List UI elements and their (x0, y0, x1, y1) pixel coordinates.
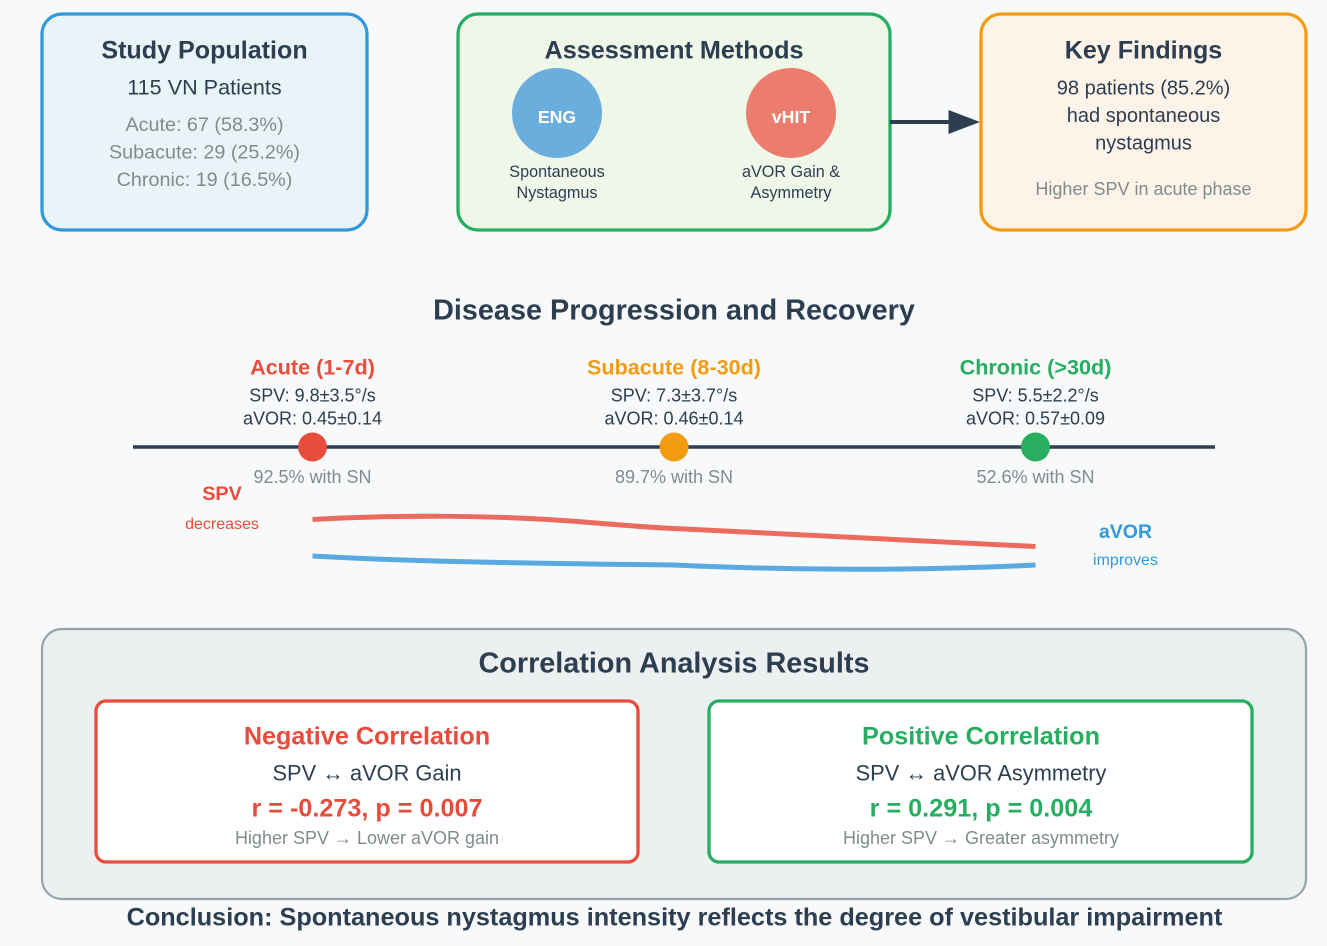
text: main finding: 98 patients (85.2%) (1057, 78, 1230, 100)
text: vHIT label: Asymmetry (751, 184, 832, 202)
label: aVOR improves: aVOR (1099, 521, 1152, 543)
timeline point: acute: 92.5% with SN (253, 467, 372, 487)
text: main finding: nystagmus (1095, 132, 1192, 154)
heading: disease progression: Disease Progression and Recovery (433, 294, 915, 326)
label: SPV decreases (185, 483, 259, 533)
text: main finding: had spontaneous (1067, 105, 1220, 127)
icon: vHIT circle: vHIT (772, 107, 810, 127)
trend line: SPV (312, 516, 1036, 546)
panel: study population (42, 14, 367, 230)
panel: assessment methods (458, 14, 890, 230)
timeline point: chronic: Chronic (>30d) (960, 354, 1111, 380)
text: phase breakdown: Subacute: 29 (25.2%) (109, 142, 300, 164)
panel: correlation analysis (42, 629, 1306, 899)
timeline point: acute: aVOR: 0.45±0.14 (243, 408, 382, 428)
heading: assessment methods: Assessment Methods (545, 36, 803, 64)
label: SPV decreases: decreases (185, 516, 259, 533)
timeline point: subacute: Subacute (8-30d) (587, 354, 761, 380)
timeline point: chronic (960, 354, 1111, 487)
card: negative correlation: r = -0.273, p = 0.007 (251, 794, 483, 822)
card: negative correlation: Higher SPV → Lower aVOR gain (235, 828, 499, 848)
text: acute phase note: Higher SPV in acute phase (1035, 179, 1252, 199)
card: positive correlation: Positive Correlation (862, 722, 1100, 750)
label: SPV decreases: SPV (202, 483, 243, 505)
text: ENG label: Spontaneous (509, 163, 605, 181)
icon: vHIT circle (746, 68, 836, 158)
text: vHIT label (742, 163, 840, 202)
icon: ENG circle: ENG (538, 107, 576, 127)
icon: ENG circle (512, 68, 602, 158)
timeline chart (133, 354, 1215, 487)
arrow: methods to findings (890, 110, 980, 134)
text: phase breakdown: Chronic: 19 (16.5%) (117, 169, 292, 191)
text: main finding (1057, 78, 1230, 154)
text: phase breakdown (109, 114, 300, 191)
text: ENG label: Nystagmus (517, 184, 597, 202)
card: positive correlation (709, 701, 1252, 862)
timeline point: subacute: SPV: 7.3±3.7°/s (611, 386, 737, 406)
text: phase breakdown: Acute: 67 (58.3%) (125, 114, 284, 136)
text: patient count: 115 VN Patients (127, 74, 282, 100)
timeline point: chronic: 52.6% with SN (976, 467, 1095, 487)
conclusion: Conclusion: Spontaneous nystagmus intensity reflects the degree of vestibular impairment (127, 904, 1223, 932)
heading: study population: Study Population (101, 36, 308, 64)
label: aVOR improves: improves (1093, 552, 1158, 569)
timeline point: acute: Acute (1-7d) (250, 354, 375, 380)
card: negative correlation: SPV ↔ aVOR Gain (273, 760, 461, 786)
timeline point: acute (243, 354, 382, 487)
card: negative correlation (96, 701, 638, 862)
card: positive correlation: r = 0.291, p = 0.004 (870, 794, 1092, 822)
label: aVOR improves (1093, 521, 1158, 569)
heading: key findings: Key Findings (1065, 36, 1222, 64)
timeline point: subacute (587, 354, 761, 487)
timeline point: chronic: SPV: 5.5±2.2°/s (972, 386, 1099, 406)
timeline point: subacute: 89.7% with SN (615, 467, 733, 487)
card: negative correlation: Negative Correlation (244, 722, 490, 750)
trend line: aVOR (312, 556, 1036, 569)
text: ENG label (509, 163, 605, 202)
timeline point: subacute: aVOR: 0.46±0.14 (605, 408, 743, 428)
heading: correlation analysis: Correlation Analysis Results (478, 648, 870, 680)
timeline point: acute: SPV: 9.8±3.5°/s (249, 386, 376, 406)
card: positive correlation: Higher SPV → Greater asymmetry (843, 828, 1119, 848)
card: positive correlation: SPV ↔ aVOR Asymmetry (856, 760, 1106, 786)
timeline point: chronic: aVOR: 0.57±0.09 (966, 408, 1105, 428)
panel: key findings (981, 14, 1306, 230)
text: vHIT label: aVOR Gain & (742, 163, 840, 181)
